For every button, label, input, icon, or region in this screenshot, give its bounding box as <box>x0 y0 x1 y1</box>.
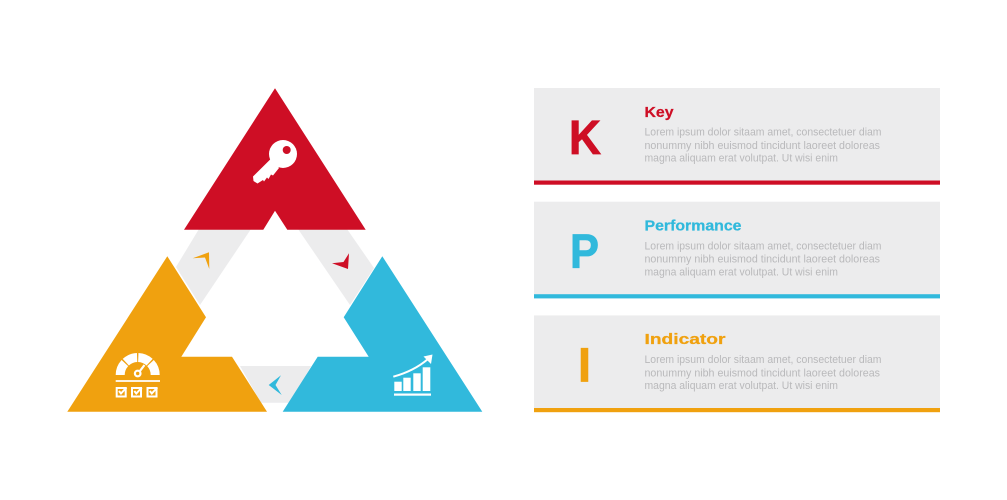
panel: P - Performance <box>534 202 940 298</box>
body text: magna aliquam erat volutpat. Ut wisi enim <box>644 153 838 165</box>
connector band: red to blue <box>298 229 374 305</box>
icon: key <box>253 140 297 184</box>
arrow: red <box>332 253 349 269</box>
red triangle segment <box>184 88 366 230</box>
orange triangle segment <box>67 256 267 412</box>
orange underline <box>534 408 940 412</box>
panel: I - Indicator <box>534 315 940 412</box>
body text: Lorem ipsum dolor sitaam amet, consectetuer diam <box>644 127 882 139</box>
blue underline <box>534 294 940 298</box>
body text <box>644 127 882 165</box>
triangle cycle diagram <box>67 88 482 412</box>
panel: K - Key <box>534 88 940 185</box>
body text: magna aliquam erat volutpat. Ut wisi enim <box>644 380 838 392</box>
body text: nonummy nibh euismod tincidunt laoreet doloreas <box>644 367 880 379</box>
heading: Key: Key <box>644 105 674 121</box>
letter P: P <box>570 226 599 279</box>
body text <box>644 240 882 278</box>
connector band: blue to orange <box>240 366 311 403</box>
heading: Performance: Performance <box>644 218 742 234</box>
body text: Lorem ipsum dolor sitaam amet, consectetuer diam <box>644 240 882 252</box>
body text: magna aliquam erat volutpat. Ut wisi enim <box>644 266 838 278</box>
icon: growth chart <box>393 354 432 396</box>
body text: Lorem ipsum dolor sitaam amet, consectetuer diam <box>644 354 882 366</box>
body text <box>644 354 882 392</box>
body text: nonummy nibh euismod tincidunt laoreet doloreas <box>644 254 880 266</box>
heading: Indicator: Indicator <box>644 332 726 348</box>
letter K: K <box>569 112 601 165</box>
arrow: orange <box>193 252 209 269</box>
arrow: blue <box>269 375 282 395</box>
letter I: I <box>578 339 591 392</box>
icon: gauge with checkboxes <box>116 358 160 396</box>
connector band: orange to red <box>176 229 251 305</box>
red underline <box>534 180 940 185</box>
blue triangle segment <box>283 256 482 412</box>
body text: nonummy nibh euismod tincidunt laoreet doloreas <box>644 140 880 152</box>
